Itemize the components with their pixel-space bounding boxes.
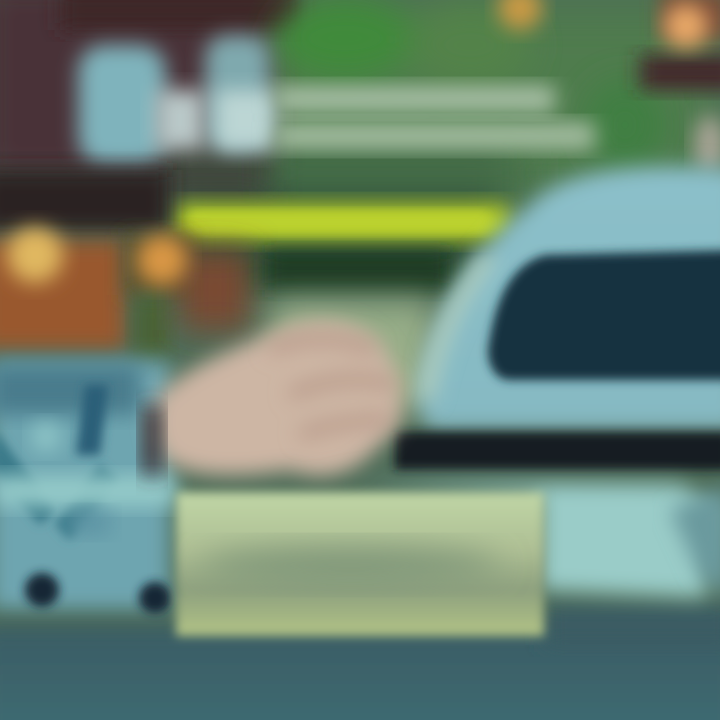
cart wheels [25,573,59,607]
heading: blurred title block [78,35,595,165]
hand: clasped fist [142,320,402,476]
panel: green paper [176,492,544,636]
building: dark roof and orange wall [0,170,250,360]
lights: warm top right lamps [498,0,720,175]
building: upper left brown wall [0,0,300,195]
car window [488,250,720,380]
car body [418,166,720,430]
cart: blue teal shopping cart [0,360,175,614]
lights: two glowing lamps [7,227,187,285]
foliage: green tree top [270,0,665,190]
background: dark green hedge and pale ground [265,252,450,410]
car pale edge [425,255,490,400]
car: teal vehicle [395,166,720,470]
panel: pale teal sheet [350,482,720,600]
car lower stripe [395,432,720,470]
banner: yellow green bar [172,203,512,241]
finger ridges [270,339,395,435]
floor: slate ground [0,605,720,720]
